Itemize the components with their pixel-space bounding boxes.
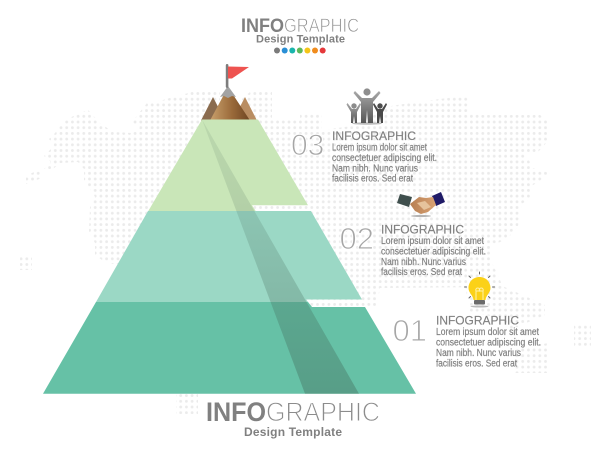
icon: light bulb bbox=[464, 272, 494, 308]
text block 03: Lorem ipsum dolor sit amet bbox=[332, 142, 427, 154]
tier 3 bbox=[148, 120, 308, 212]
bottom title: INFO bbox=[206, 397, 266, 427]
text block 03 bbox=[332, 129, 437, 184]
text block 02: consectetuer adipiscing elit. bbox=[381, 246, 486, 257]
top title: Design Template bbox=[256, 34, 345, 46]
bottom title: Design Template bbox=[244, 425, 342, 439]
text block 01: Lorem ipsum dolor sit amet bbox=[436, 327, 539, 338]
text block 01: INFOGRAPHIC bbox=[436, 314, 519, 328]
text block 02 bbox=[381, 222, 486, 278]
text block 01: Nam nibh. Nunc varius bbox=[436, 348, 521, 359]
tier 2 bbox=[96, 211, 362, 302]
bottom title: GRAPHIC bbox=[266, 397, 380, 427]
top title: GRAPHIC bbox=[284, 15, 359, 37]
text block 03: Nam nibh. Nunc varius bbox=[332, 163, 418, 174]
top title: INFO bbox=[241, 15, 284, 37]
dotted world map background bbox=[0, 80, 600, 420]
text block 02: facilisis eros. Sed erat bbox=[381, 267, 462, 278]
number 01: 01 bbox=[392, 313, 427, 348]
text block 02: Lorem ipsum dolor sit amet bbox=[381, 236, 484, 247]
number 02: 02 bbox=[340, 221, 374, 256]
bottom title bbox=[206, 397, 380, 439]
text block 01 bbox=[436, 314, 541, 370]
icon: mountain with flag bbox=[201, 64, 257, 120]
diagonal shadow band bbox=[202, 120, 359, 394]
colour dots row bbox=[274, 48, 326, 54]
tier 1 bbox=[43, 302, 416, 394]
pyramid bbox=[43, 120, 416, 394]
text block 03: INFOGRAPHIC bbox=[332, 129, 416, 143]
number 03: 03 bbox=[291, 129, 324, 162]
top title bbox=[241, 15, 359, 46]
text block 03: facilisis eros. Sed erat bbox=[332, 174, 413, 184]
text block 03: consectetuer adipiscing elit. bbox=[332, 153, 437, 164]
text block 01: facilisis eros. Sed erat bbox=[436, 358, 517, 370]
icon: people bbox=[346, 88, 387, 125]
text block 02: INFOGRAPHIC bbox=[381, 222, 464, 236]
text block 02: Nam nibh. Nunc varius bbox=[381, 257, 466, 268]
icon: handshake bbox=[397, 192, 445, 217]
text block 01: consectetuer adipiscing elit. bbox=[436, 338, 541, 348]
